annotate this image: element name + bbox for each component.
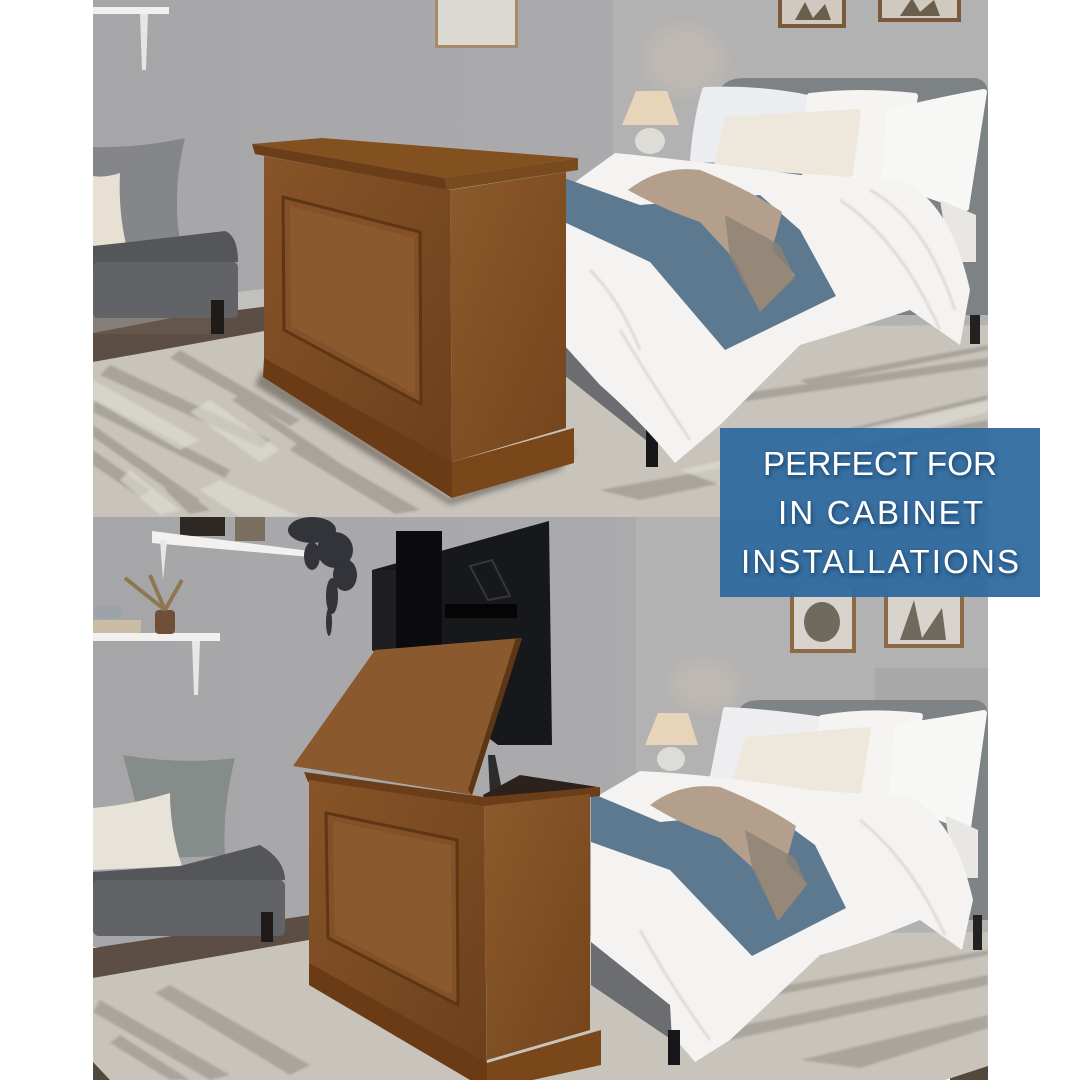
recessed front panel <box>326 813 458 1005</box>
lamp <box>645 713 698 771</box>
bed frame and legs <box>564 300 980 467</box>
floor <box>93 305 270 362</box>
wall shelf <box>93 7 169 70</box>
raised lid <box>293 638 522 795</box>
blue blanket <box>564 178 836 350</box>
headboard <box>720 78 988 315</box>
duvet <box>591 771 973 1062</box>
banner text: PERFECT FOR <box>763 445 997 482</box>
banner text <box>741 445 1019 580</box>
open cabinet interior <box>483 775 598 800</box>
mattress edge <box>940 200 976 262</box>
back walls <box>93 0 988 340</box>
cabinet top <box>252 138 578 178</box>
banner text: INSTALLATIONS <box>741 543 1019 580</box>
blue blanket <box>591 793 846 956</box>
cabinet side panel <box>484 794 590 1060</box>
bench with pillows <box>93 755 285 942</box>
plinth <box>263 358 452 498</box>
plinth <box>309 963 487 1080</box>
rug <box>93 932 988 1080</box>
wall art frames right <box>778 0 961 28</box>
beige throw <box>650 786 807 921</box>
cabinet front panel <box>264 156 452 470</box>
wall art frames <box>790 597 964 653</box>
recessed front panel <box>283 197 421 404</box>
cabinet shadow <box>255 370 576 505</box>
wall art frame centre <box>435 0 518 48</box>
photo: lifted cabinet with TV <box>93 517 988 1080</box>
banner background <box>720 428 1040 597</box>
cabinet front panel <box>309 780 487 1080</box>
pillows <box>712 710 984 828</box>
duvet <box>564 153 970 463</box>
banner: perfect for in cabinet installations <box>720 428 1040 597</box>
cabinet side panel <box>450 172 566 462</box>
headboard <box>738 700 988 920</box>
pillows <box>693 90 984 208</box>
bench with pillows <box>93 138 238 334</box>
television on lift <box>372 521 552 745</box>
bed frame and leg <box>591 915 982 1065</box>
photo: closed cabinet in bedroom <box>93 0 988 517</box>
tv support arm <box>488 755 503 795</box>
rug <box>93 325 988 517</box>
back walls <box>93 517 988 947</box>
floor <box>93 915 320 978</box>
upper shelf with frames and plant <box>152 517 357 636</box>
lamp <box>622 91 679 154</box>
banner text: IN CABINET <box>778 494 983 531</box>
lower shelf with decor <box>93 575 220 695</box>
beige throw <box>628 169 795 312</box>
closed cabinet <box>252 138 578 505</box>
lifted cabinet <box>293 638 601 1080</box>
mattress edge <box>945 815 978 878</box>
cabinet lip <box>304 772 600 808</box>
